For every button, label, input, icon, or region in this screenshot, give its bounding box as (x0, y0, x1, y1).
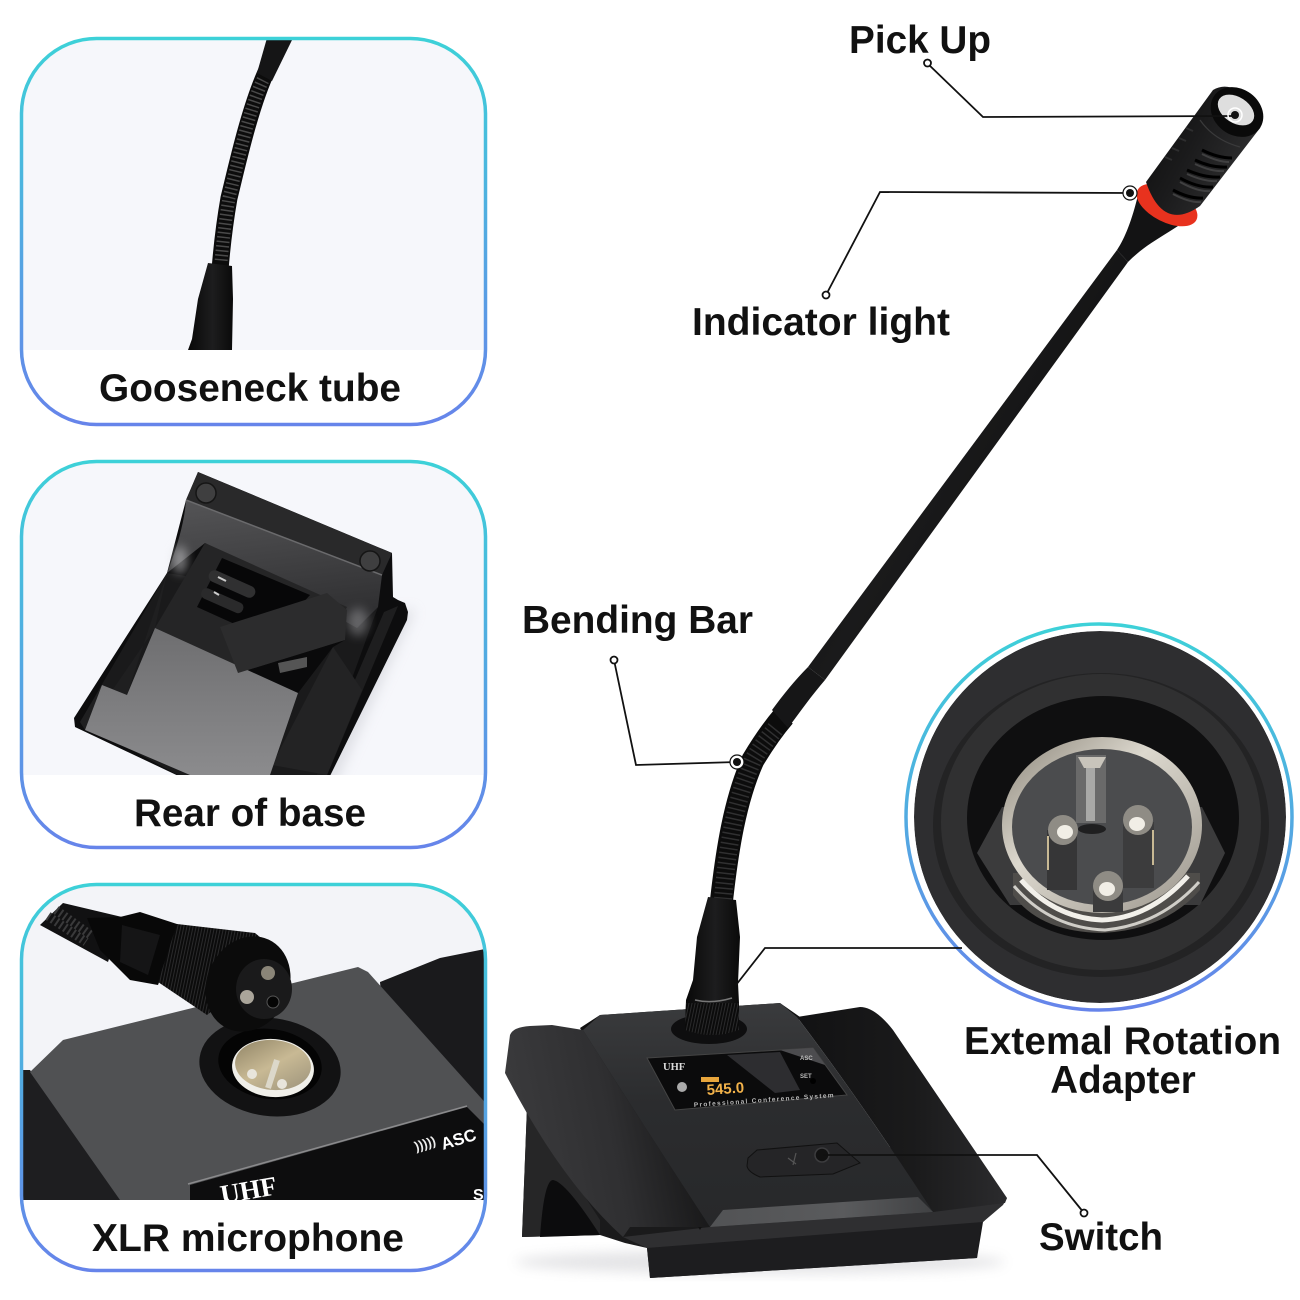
heading: xlr microphone: XLR microphone (92, 1217, 404, 1260)
icon: xlr socket photo (20, 948, 490, 1210)
leader line: external rotation adapter (736, 948, 962, 985)
leader line: pick up (924, 60, 1242, 122)
leader line: indicator light (822, 186, 1137, 298)
label: bending bar: Bending Bar (522, 599, 753, 642)
panel: gooseneck tube (20, 38, 488, 424)
leader line: switch (823, 1155, 1088, 1216)
panel: rear of base (20, 461, 488, 848)
display text: UHF (663, 1062, 685, 1073)
leader line: bending bar (610, 656, 744, 769)
label: indicator light: Indicator light (692, 301, 950, 344)
heading: rear of base: Rear of base (134, 792, 366, 835)
display text (663, 1056, 834, 1109)
text: device markings (220, 1130, 484, 1200)
base of microphone (505, 1003, 1007, 1278)
text: device markings: ASC (439, 1125, 479, 1154)
label: pick up: Pick Up (849, 19, 991, 62)
label: switch: Switch (1039, 1216, 1163, 1259)
icon: xlr connector (1002, 737, 1202, 933)
panel: xlr microphone (20, 884, 490, 1270)
label: external rotation adapter: Extemal Rotation (964, 1020, 1281, 1063)
icon: rear of base photo (74, 472, 415, 785)
icon: xlr plug and cable (40, 903, 292, 1030)
illustration: conference microphone (505, 77, 1273, 1278)
gooseneck and bar (685, 250, 1128, 1035)
icon: gooseneck tube photo (188, 38, 293, 350)
display text: 545.0 (706, 1079, 745, 1099)
text: device markings: ))))) (412, 1133, 438, 1154)
microphone head with indicator ring (1117, 77, 1273, 262)
display text: Professional Conference System (694, 1092, 834, 1109)
label: external rotation adapter: Adapter (1050, 1059, 1196, 1102)
display text: ASC (800, 1056, 813, 1062)
text: device markings: UHF (218, 1170, 279, 1210)
display text: SET (800, 1074, 812, 1080)
text: device markings: S (473, 1187, 484, 1204)
circle inset: external rotation adapter (906, 624, 1292, 1010)
heading: gooseneck tube: Gooseneck tube (99, 367, 401, 410)
